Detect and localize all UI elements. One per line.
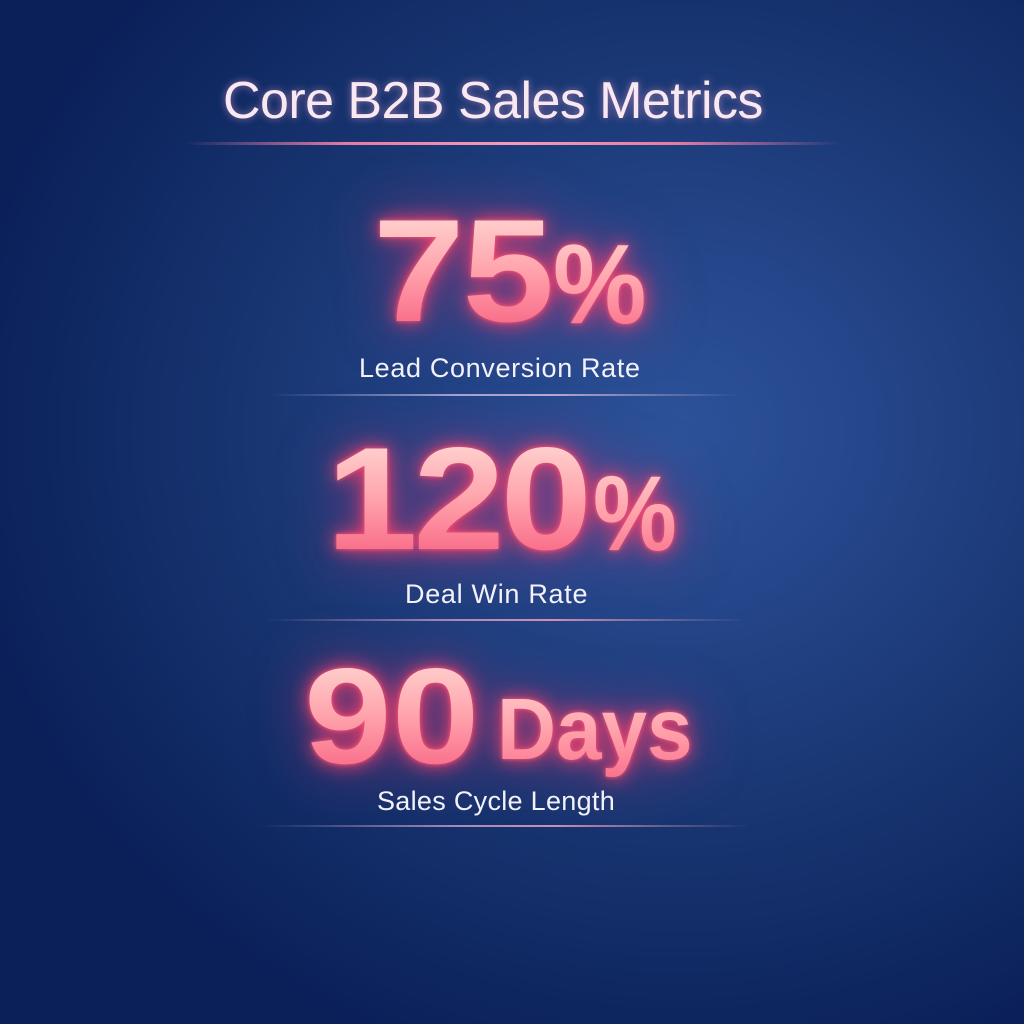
metric: sales cycle bbox=[276, 636, 717, 816]
percent sign: % bbox=[593, 453, 677, 573]
value: 75% bbox=[359, 184, 674, 356]
divider 3 bbox=[260, 825, 750, 827]
value: 90 Days bbox=[276, 636, 717, 802]
label: sales cycle length: Sales Cycle Length bbox=[377, 786, 615, 816]
metric: deal win bbox=[314, 414, 704, 609]
title: Core B2B Sales Metrics bbox=[223, 72, 763, 130]
divider 2 bbox=[265, 619, 745, 621]
divider 1 bbox=[270, 394, 740, 396]
label: lead conversion rate: Lead Conversion Rate bbox=[359, 353, 641, 383]
unit: Days: Days bbox=[497, 681, 693, 778]
title underline bbox=[185, 142, 840, 145]
value: 120% bbox=[314, 414, 704, 586]
label: deal win rate: Deal Win Rate bbox=[405, 579, 588, 609]
digits: 75: 75 bbox=[373, 189, 552, 352]
percent sign: % bbox=[553, 221, 646, 347]
digits: 90: 90 bbox=[304, 640, 479, 792]
digits: 120: 120 bbox=[326, 417, 588, 580]
unit: Days bbox=[497, 650, 693, 810]
metric: lead conversion bbox=[359, 184, 674, 383]
